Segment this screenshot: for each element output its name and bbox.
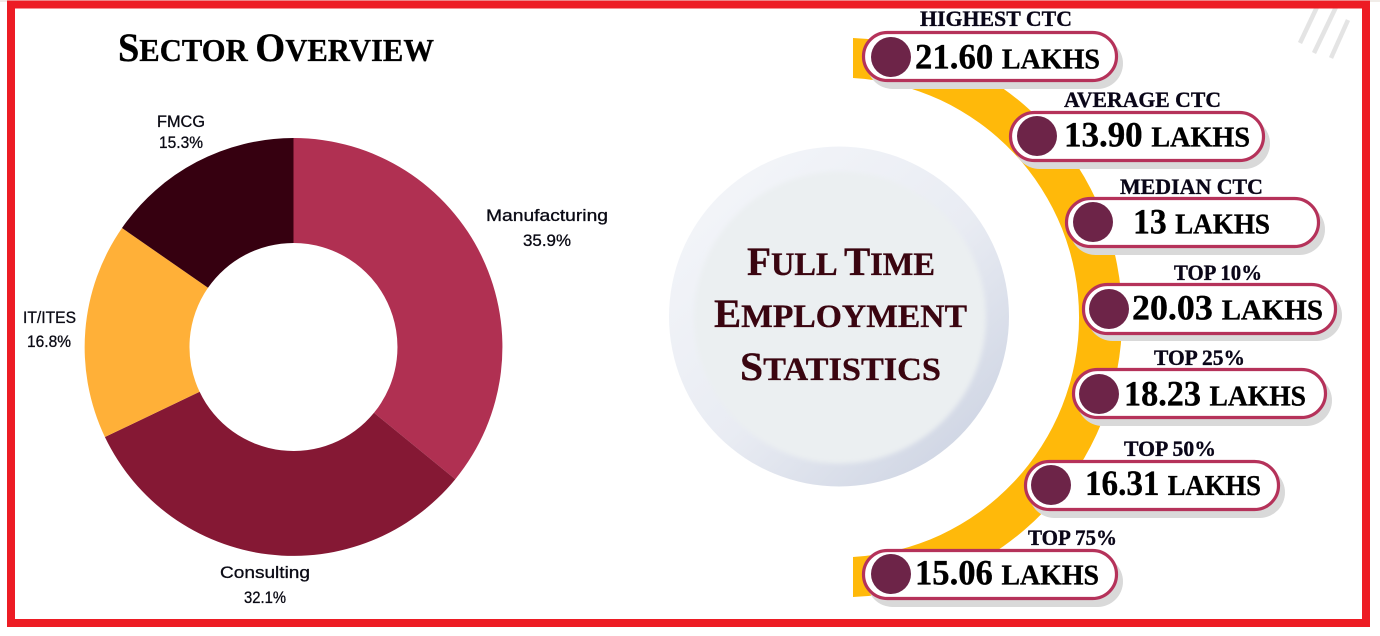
label: consulting [220, 564, 310, 607]
stat: top 10%: 20.03 LAKHS [1132, 288, 1323, 328]
stat: top 75% [864, 525, 1123, 607]
label: FMCG: FMCG [157, 113, 205, 131]
label: consulting: 32.1% [244, 589, 286, 607]
stat: top 75%: 15.06 LAKHS [915, 552, 1099, 592]
label: IT/ITES: 16.8% [27, 333, 71, 351]
stat: top 75%: TOP 75% [1028, 525, 1117, 550]
text: employment: EMPLOYMENT [714, 291, 967, 336]
label: FMCG: 15.3% [159, 134, 203, 152]
label: manufacturing: Manufacturing [486, 207, 608, 225]
label: IT/ITES [23, 309, 76, 351]
stat: highest ctc: 21.60 LAKHS [915, 36, 1100, 76]
stat: average ctc: AVERAGE CTC [1064, 87, 1221, 112]
label: IT/ITES: IT/ITES [23, 309, 76, 327]
stat: highest ctc: HIGHEST CTC [920, 6, 1072, 31]
stat: top 10%: TOP 10% [1174, 260, 1262, 285]
heading: sector overview: SECTOR OVERVIEW [118, 25, 434, 70]
label: FMCG [157, 113, 205, 152]
segment: manufacturing 35.9% [294, 138, 502, 479]
stat: median ctc: MEDIAN CTC [1120, 174, 1263, 199]
stat: highest ctc [864, 6, 1123, 89]
stat: top 25%: 18.23 LAKHS [1124, 374, 1306, 414]
stat: top 50%: 16.31 LAKHS [1085, 463, 1261, 503]
stat: median ctc [1066, 174, 1325, 255]
centre disc: full time employment statistics [669, 146, 1009, 486]
stat: top 25% [1074, 345, 1332, 426]
segment: IT/ITES 16.8% [85, 228, 208, 437]
segment: FMCG 15.3% [122, 138, 294, 288]
stat: top 50% [1026, 436, 1285, 518]
text: full time: FULL TIME [747, 239, 935, 284]
arc: yellow band [853, 38, 1122, 597]
stat: top 25%: TOP 25% [1154, 345, 1245, 370]
label: consulting: Consulting [220, 564, 310, 582]
label: manufacturing [486, 207, 608, 250]
stat: top 10% [1084, 260, 1342, 341]
stat: top 50%: TOP 50% [1124, 436, 1216, 461]
stat: average ctc [1010, 87, 1270, 169]
text: statistics: STATISTICS [740, 344, 941, 389]
segment: consulting 32.1% [105, 392, 455, 556]
label: manufacturing: 35.9% [523, 232, 571, 250]
stat: average ctc: 13.90 LAKHS [1064, 114, 1250, 154]
donut chart: sector overview [85, 138, 502, 556]
stat: median ctc: 13 LAKHS [1133, 202, 1270, 242]
